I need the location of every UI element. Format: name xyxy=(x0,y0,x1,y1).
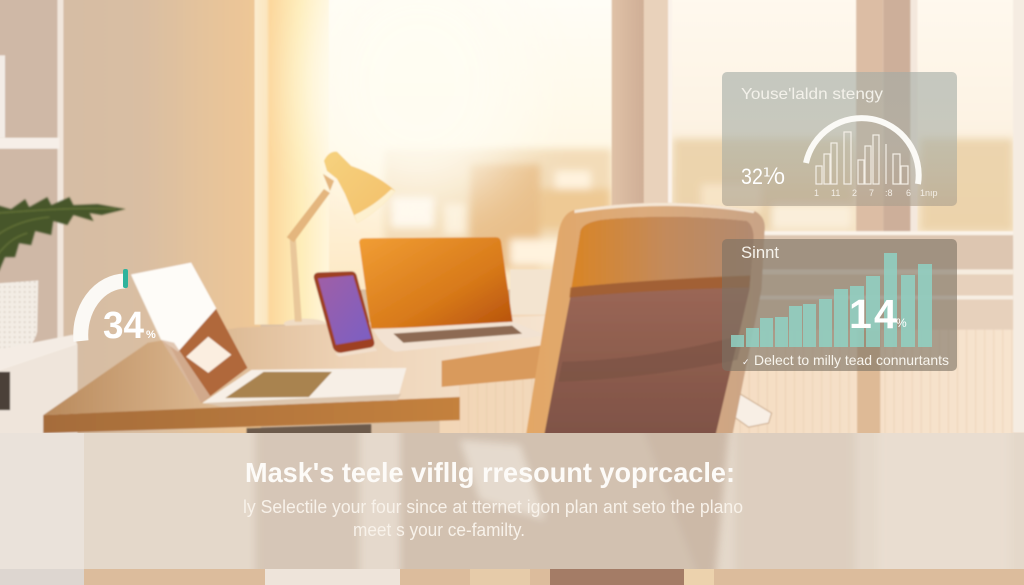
plant pot xyxy=(0,280,38,351)
bookshelf xyxy=(0,0,63,345)
back desk edge xyxy=(442,345,545,387)
office chair xyxy=(525,203,772,440)
axis labels: 1nıp xyxy=(920,188,938,198)
smartphone xyxy=(314,271,377,357)
laptop base xyxy=(202,368,406,406)
sun glow xyxy=(309,0,530,204)
laptop: rear xyxy=(359,237,547,352)
axis labels xyxy=(814,188,938,198)
laptop screen xyxy=(131,262,247,403)
axis labels: 1 xyxy=(814,188,819,198)
axis labels: 6 xyxy=(906,188,911,198)
axis labels: 7 xyxy=(869,188,874,198)
band shadow shapes xyxy=(254,433,852,569)
axis labels: 11 xyxy=(831,188,840,198)
checklist caption: ✓ xyxy=(742,357,750,367)
axis labels: :8 xyxy=(885,188,893,198)
bar chart xyxy=(731,253,932,347)
left gauge: 34%: % xyxy=(146,329,156,341)
lower floor strip xyxy=(0,569,1024,585)
plant xyxy=(0,197,126,351)
back desk xyxy=(43,316,548,415)
panel: lower stats: % xyxy=(896,316,907,330)
chair upper back xyxy=(571,217,754,287)
heading: Mask's teele vifllg rresount yoprcacle: xyxy=(245,457,735,488)
panel: lower stats: 4 xyxy=(874,291,897,337)
radiator wall xyxy=(440,274,1013,440)
body text: ly Selectile your four since at tternet igon plan ant seto the plano xyxy=(243,497,743,517)
left gauge: 34%: 34 xyxy=(103,305,144,347)
text band xyxy=(0,433,1024,569)
panel heading: Youse'laldn stengy xyxy=(741,86,883,103)
curtain xyxy=(255,0,339,325)
chair frame xyxy=(525,203,765,440)
panel: top stats xyxy=(722,72,957,206)
bar chart xyxy=(816,132,908,184)
desk lamp xyxy=(284,152,395,329)
stat: 14%: 1 xyxy=(849,291,872,337)
window right xyxy=(671,0,1018,239)
cabinet xyxy=(0,335,77,440)
chair armrest xyxy=(734,393,772,427)
panel: lower stats xyxy=(722,239,957,371)
text band: meet s your ce-familty. xyxy=(353,520,525,540)
window frames xyxy=(510,0,1024,433)
panel heading: Sinnt xyxy=(741,243,779,262)
arc gauge xyxy=(806,118,919,184)
front desk xyxy=(43,397,460,440)
stat: 32%: 32⅟o xyxy=(741,164,785,189)
window left xyxy=(329,0,613,289)
laptop: front xyxy=(131,262,406,407)
axis labels: 2 xyxy=(852,188,857,198)
left gauge: 34% xyxy=(81,269,156,347)
panel: lower stats: Delect to milly tead connurtants xyxy=(754,352,949,368)
background: room scene xyxy=(0,0,1024,440)
wall xyxy=(0,0,261,440)
